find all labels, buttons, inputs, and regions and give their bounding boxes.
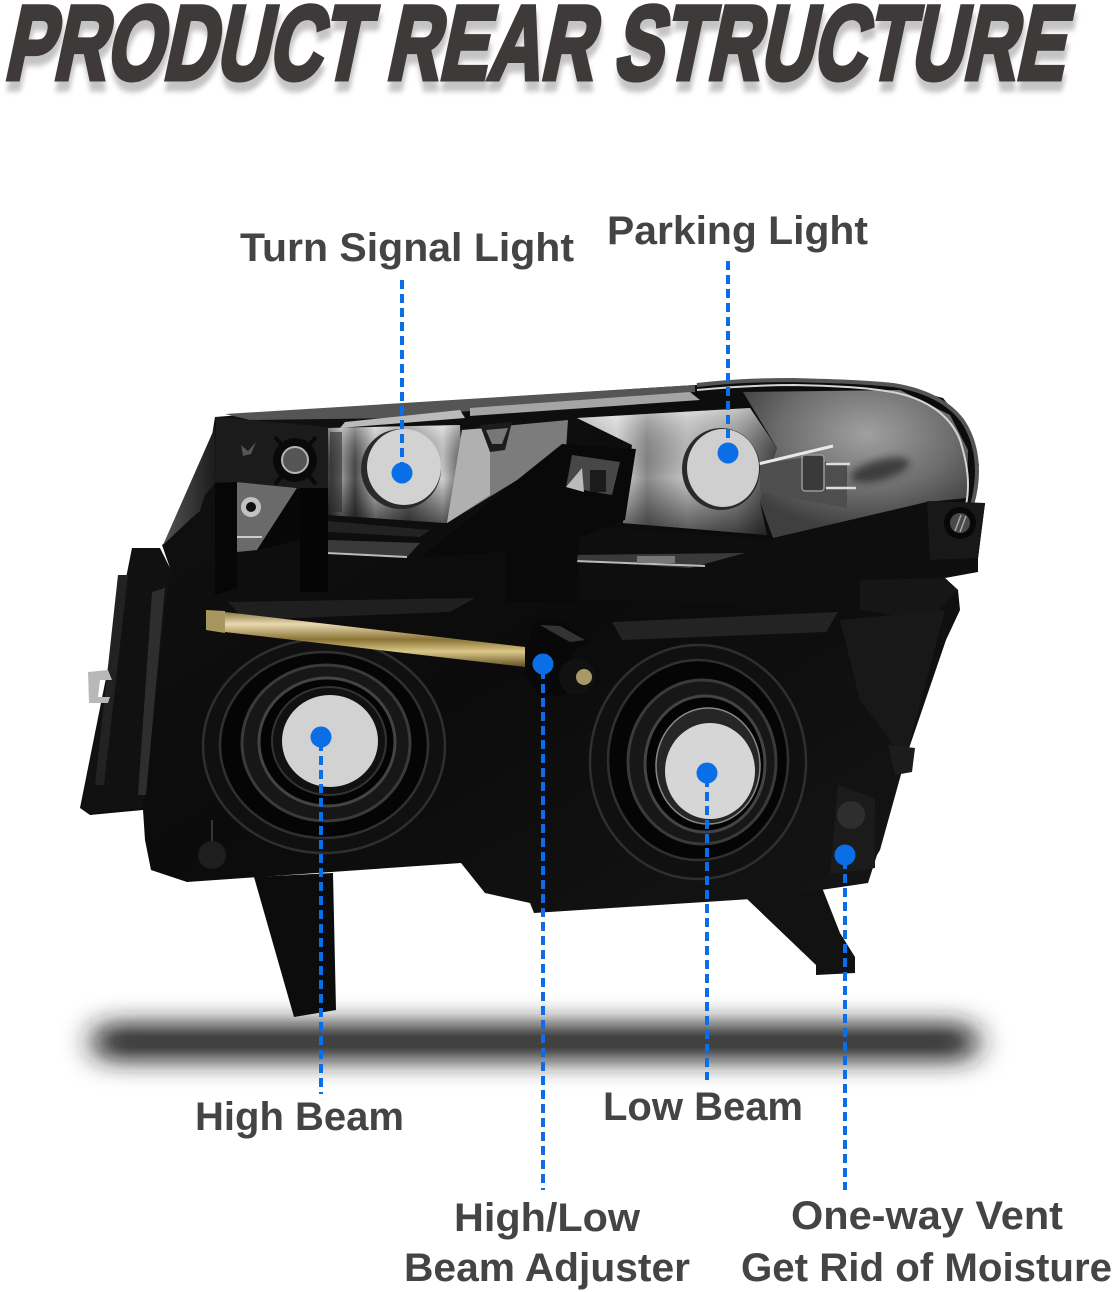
tab left <box>88 670 112 703</box>
mounting foot left <box>254 873 336 1017</box>
callout: turn signal light <box>240 226 574 484</box>
callout: low beam: Low Beam <box>603 1085 803 1129</box>
callout: high/low beam adjuster: Beam Adjuster <box>404 1246 690 1290</box>
callout: parking light: Parking Light <box>607 209 868 253</box>
housing upper panels <box>228 578 958 760</box>
left grey wedge <box>163 427 215 545</box>
high beam seal <box>282 695 378 787</box>
grommet left <box>241 437 317 484</box>
lens top strip <box>225 385 700 428</box>
smoked lens <box>743 390 968 538</box>
parking light seal <box>682 428 760 510</box>
chrome centre notch <box>447 420 568 523</box>
right lamp chrome reflector <box>577 408 777 535</box>
right bracket <box>927 501 985 560</box>
vertical ribs <box>215 482 328 595</box>
left window under plate <box>237 482 328 592</box>
bulb connector <box>758 446 912 508</box>
callout: high beam: High Beam <box>195 1095 404 1139</box>
clip right <box>888 745 915 775</box>
adjuster clip <box>525 620 595 698</box>
callout: one-way vent: One-way Vent <box>791 1194 1063 1238</box>
callout: turn signal light: Turn Signal Light <box>240 226 574 270</box>
adjuster rod <box>206 610 525 667</box>
screw lower left <box>198 820 226 869</box>
headlight assembly, rear view <box>80 380 985 1017</box>
callout: high/low beam adjuster <box>404 654 690 1290</box>
callout: parking light <box>607 209 868 464</box>
callout: low beam <box>603 762 803 1129</box>
top left black plate <box>215 417 328 500</box>
mounting foot right <box>746 880 855 975</box>
callout: one-way vent: Get Rid of Moisture <box>741 1246 1112 1290</box>
lower reflector shelves <box>327 521 430 557</box>
housing silhouette <box>80 380 985 913</box>
left side flange <box>81 549 170 814</box>
lens chrome edge <box>697 380 977 505</box>
low beam socket <box>590 645 806 879</box>
one-way vent <box>830 785 875 874</box>
callout: high/low beam adjuster: High/Low <box>454 1196 641 1240</box>
central diagonal bracket <box>420 444 636 602</box>
ground shadow <box>92 1024 978 1060</box>
callout: high beam <box>195 726 404 1139</box>
right shelf strip <box>575 553 745 568</box>
silver ring <box>241 497 261 517</box>
turn signal seal <box>361 429 441 509</box>
low beam seal <box>665 723 755 819</box>
high beam socket <box>203 639 445 853</box>
callout: one-way vent <box>741 844 1112 1290</box>
left lamp chrome reflector <box>328 425 463 523</box>
dark reflector below right lamp <box>580 502 985 605</box>
